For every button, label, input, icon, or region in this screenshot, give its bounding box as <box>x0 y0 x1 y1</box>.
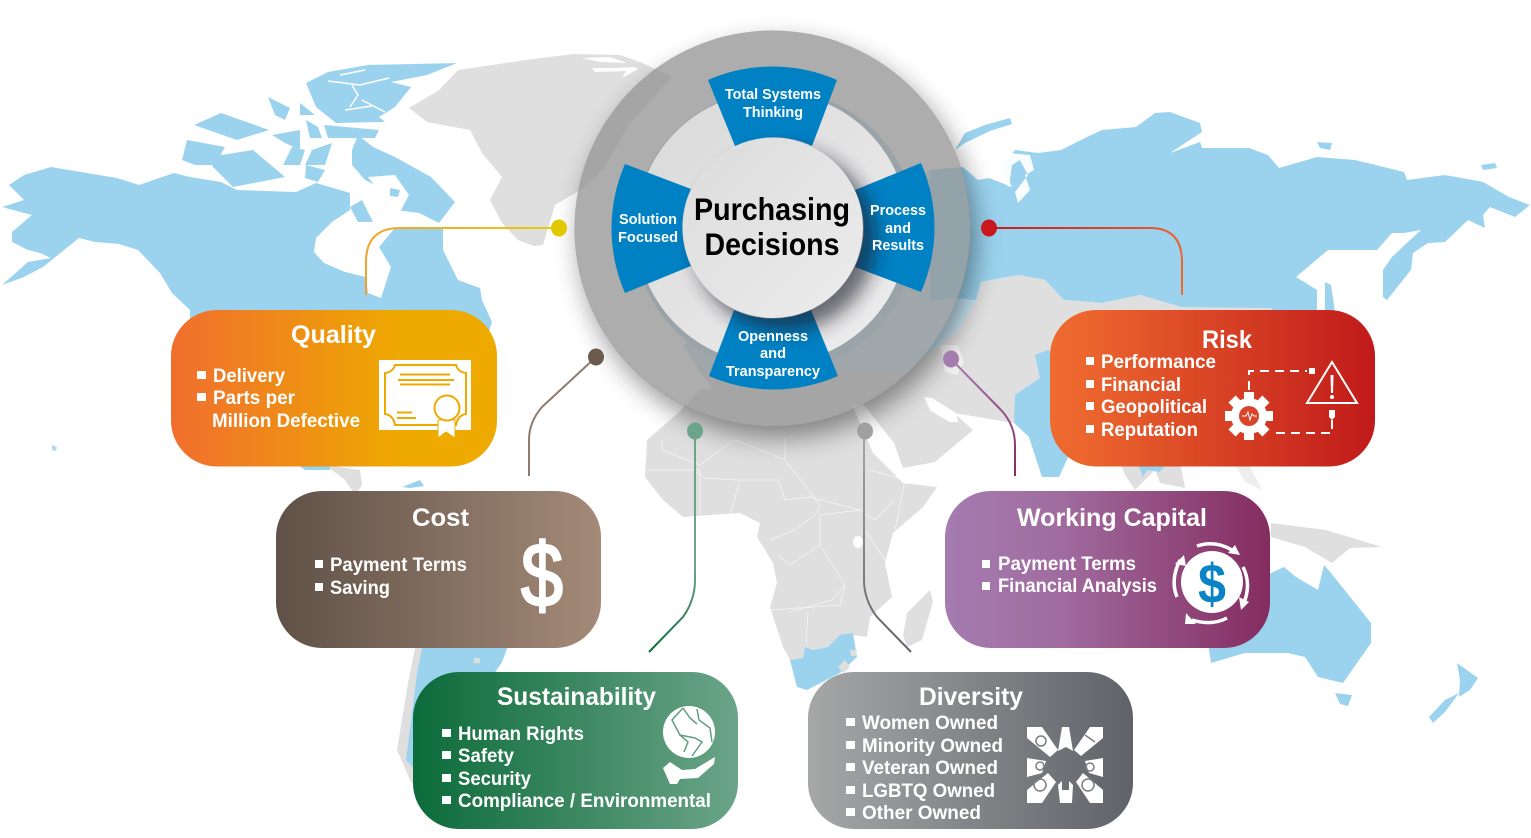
panel: Diversity <box>808 672 1133 829</box>
label: Total Systems Thinking <box>725 86 821 121</box>
panel: Cost: Payment Terms <box>330 555 467 576</box>
panel: Sustainability: Compliance / Environmental <box>458 791 711 812</box>
map: South Africa <box>790 633 857 690</box>
panel: Quality: Million Defective <box>212 411 360 432</box>
label: Process and Results: and <box>885 220 911 237</box>
map: Central Asia and Middle East <box>700 275 1272 423</box>
label: Total Systems Thinking: Thinking <box>743 104 803 121</box>
panel: Risk: Performance <box>1101 352 1216 373</box>
panel: Diversity: LGBTQ Owned <box>862 781 995 802</box>
map: Europe <box>683 170 976 372</box>
map: Arctic islands <box>182 63 457 223</box>
map: Africa borders <box>640 438 905 645</box>
map: Tasmania and New Zealand <box>1335 663 1478 723</box>
panel: Risk: Geopolitical <box>1101 397 1207 418</box>
panel: Working Capital: Payment Terms <box>998 554 1136 575</box>
panel: Diversity: Women Owned <box>862 713 998 734</box>
map: Caspian Sea <box>940 345 964 375</box>
panel: Cost <box>276 491 601 648</box>
map: White Sea and Baltic water <box>1001 153 1034 203</box>
panel: Quality: Parts per <box>213 388 296 409</box>
title: Purchasing Decisions: Decisions <box>704 226 840 262</box>
inner rim <box>634 90 916 372</box>
panel: Working Capital: Financial Analysis <box>998 576 1157 597</box>
connector: Quality <box>366 220 567 295</box>
label: Total Systems Thinking: Total Systems <box>725 86 821 103</box>
map: Hudson strait water <box>352 190 446 228</box>
panel: Cost: Cost <box>412 504 470 532</box>
map: Foxe Basin water <box>368 175 409 215</box>
connector: Risk <box>981 220 1182 295</box>
map: Australia <box>1205 565 1371 683</box>
icon: dollar with cycle arrows: $ <box>1198 552 1226 615</box>
panel: Risk: Financial <box>1101 375 1181 396</box>
central wheel <box>574 30 976 438</box>
connector: Working Capital <box>943 350 1015 476</box>
map: Arabia <box>860 398 973 468</box>
map: Central America <box>325 465 362 495</box>
panel: Diversity: Minority Owned <box>862 736 1003 757</box>
label: Solution Focused <box>618 211 678 246</box>
icon: dollar with cycle arrows <box>1174 544 1249 624</box>
panel: Sustainability: Security <box>458 769 531 790</box>
label: Openness and Transparency: Openness <box>738 328 808 345</box>
map: Lake Victoria <box>853 536 863 548</box>
icon: circle of hands <box>1027 727 1103 803</box>
map: Greenland fjords <box>582 57 638 82</box>
blue wedges <box>612 67 934 389</box>
icon: dollar sign: $ <box>521 526 563 626</box>
map: Madagascar <box>903 590 933 647</box>
map: Southeast Asia <box>1120 462 1185 490</box>
panel: Risk <box>1050 310 1375 466</box>
label: Openness and Transparency: Transparency <box>726 363 821 380</box>
panel: Cost: Saving <box>330 578 390 599</box>
label: Solution Focused: Focused <box>618 229 678 246</box>
title: Purchasing Decisions <box>694 191 850 262</box>
panel: Sustainability: Human Rights <box>458 724 584 745</box>
map: Greenland <box>409 54 672 246</box>
connector: Sustainability <box>649 422 703 652</box>
hub shadow <box>694 149 876 331</box>
panel: Quality: Quality <box>291 321 376 349</box>
wheel shadow <box>580 42 976 438</box>
panel: Diversity: Other Owned <box>862 803 981 824</box>
panel: Diversity: Veteran Owned <box>862 758 998 779</box>
label: Openness and Transparency: and <box>760 345 786 362</box>
map: Novaya Zemlya and Sakhalin <box>955 118 1497 312</box>
panel: Risk: Reputation <box>1101 420 1198 441</box>
map: Africa <box>645 385 937 660</box>
label: Solution Focused: Solution <box>619 211 677 228</box>
icon: globe in hand <box>663 706 715 784</box>
panel: Sustainability: Sustainability <box>497 683 656 711</box>
map: Canada and Alaska <box>2 167 492 335</box>
connector: Diversity <box>857 422 911 652</box>
title: Purchasing Decisions: Purchasing <box>694 191 850 227</box>
light disc <box>636 92 908 364</box>
panel: Diversity: Diversity <box>919 683 1023 711</box>
icon: certificate <box>379 360 471 438</box>
map: India <box>1014 350 1080 477</box>
panel: Sustainability <box>413 672 738 829</box>
map: South America <box>397 638 435 790</box>
icon: gear with warning triangle <box>1225 362 1357 440</box>
label: Process and Results: Results <box>872 237 924 254</box>
map: Russia <box>930 112 1530 312</box>
map: New Guinea <box>1271 523 1382 563</box>
panel: Sustainability: Safety <box>458 746 514 767</box>
panel: Working Capital: Working Capital <box>1017 504 1207 532</box>
map: Ellesmere fjords <box>328 70 389 112</box>
connector: Cost <box>529 348 604 476</box>
hub disc <box>683 138 863 318</box>
label: Openness and Transparency <box>726 328 821 380</box>
panel: Quality: Delivery <box>213 366 285 387</box>
outer grey ring <box>574 30 970 426</box>
label: Process and Results: Process <box>870 202 926 219</box>
label: Process and Results <box>870 202 926 254</box>
panel: Working Capital <box>945 491 1270 648</box>
map: Persian Gulf <box>924 397 958 422</box>
map: Southampton and Foxe islands <box>350 188 400 222</box>
panel: Quality <box>171 310 497 466</box>
map: Hawaii <box>52 445 57 451</box>
panel: Risk: Risk <box>1202 326 1252 354</box>
